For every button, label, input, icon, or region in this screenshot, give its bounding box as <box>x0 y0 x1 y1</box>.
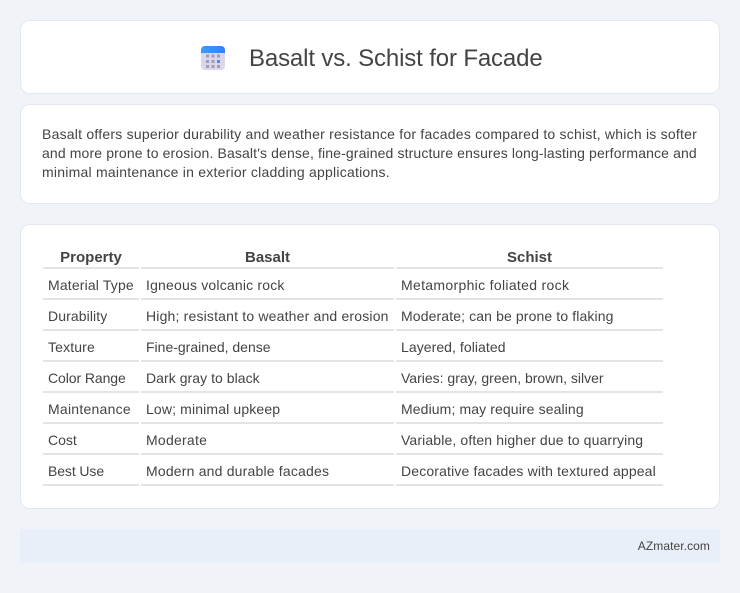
row: Maintenance: Maintenance <box>48 401 131 417</box>
row: Best Use: Decorative facades with textured appeal <box>401 463 656 479</box>
row: Durability: Durability <box>48 308 107 324</box>
row: Maintenance: Medium; may require sealing <box>401 401 584 417</box>
panel: summary text <box>20 104 720 204</box>
row: Texture: Fine-grained, dense <box>146 339 271 355</box>
row: Cost: Variable, often higher due to quarrying <box>401 432 643 448</box>
footer bar <box>20 529 720 563</box>
row: Color Range: Color Range <box>48 370 126 386</box>
row: Best Use: Best Use <box>48 463 104 479</box>
table header: Property <box>60 249 122 266</box>
table header: Schist <box>507 249 552 266</box>
row: Best Use <box>43 463 663 486</box>
row: Maintenance <box>43 401 663 424</box>
row: Durability: High; resistant to weather and erosion <box>146 308 389 324</box>
row: Cost <box>43 432 663 455</box>
title: Basalt vs. Schist for Facade <box>249 45 543 72</box>
row: Material Type: Material Type <box>48 277 134 293</box>
panel: title header <box>20 20 720 94</box>
row: Durability: Moderate; can be prone to flaking <box>401 308 614 324</box>
row: Best Use: Modern and durable facades <box>146 463 329 479</box>
table header <box>43 249 663 269</box>
row: Texture: Layered, foliated <box>401 339 506 355</box>
row: Color Range: Dark gray to black <box>146 370 260 386</box>
icon: calendar <box>201 46 225 70</box>
row: Durability <box>43 308 663 331</box>
row: Color Range: Varies: gray, green, brown, silver <box>401 370 604 386</box>
row: Texture: Texture <box>48 339 95 355</box>
text block: summary: and more prone to erosion. Basalt's dense, fine-grained structure ensures long-lasting performance and <box>42 145 697 161</box>
row: Material Type: Metamorphic foliated rock <box>401 277 569 293</box>
panel: comparison table <box>20 224 720 509</box>
text block: summary: minimal maintenance in exterior cladding applications. <box>42 164 390 180</box>
row: Texture <box>43 339 663 362</box>
row: Material Type: Igneous volcanic rock <box>146 277 285 293</box>
text block: summary: Basalt offers superior durability and weather resistance for facades compared to schist, which is softer <box>42 126 697 142</box>
row: Color Range <box>43 370 663 393</box>
row: Cost: Moderate <box>146 432 207 448</box>
text block: summary <box>42 126 697 180</box>
row: Cost: Cost <box>48 432 77 448</box>
row: Maintenance: Low; minimal upkeep <box>146 401 280 417</box>
table header: Basalt <box>245 249 290 266</box>
footer text: AZmater.com <box>638 539 710 553</box>
row: Material Type <box>43 277 663 300</box>
